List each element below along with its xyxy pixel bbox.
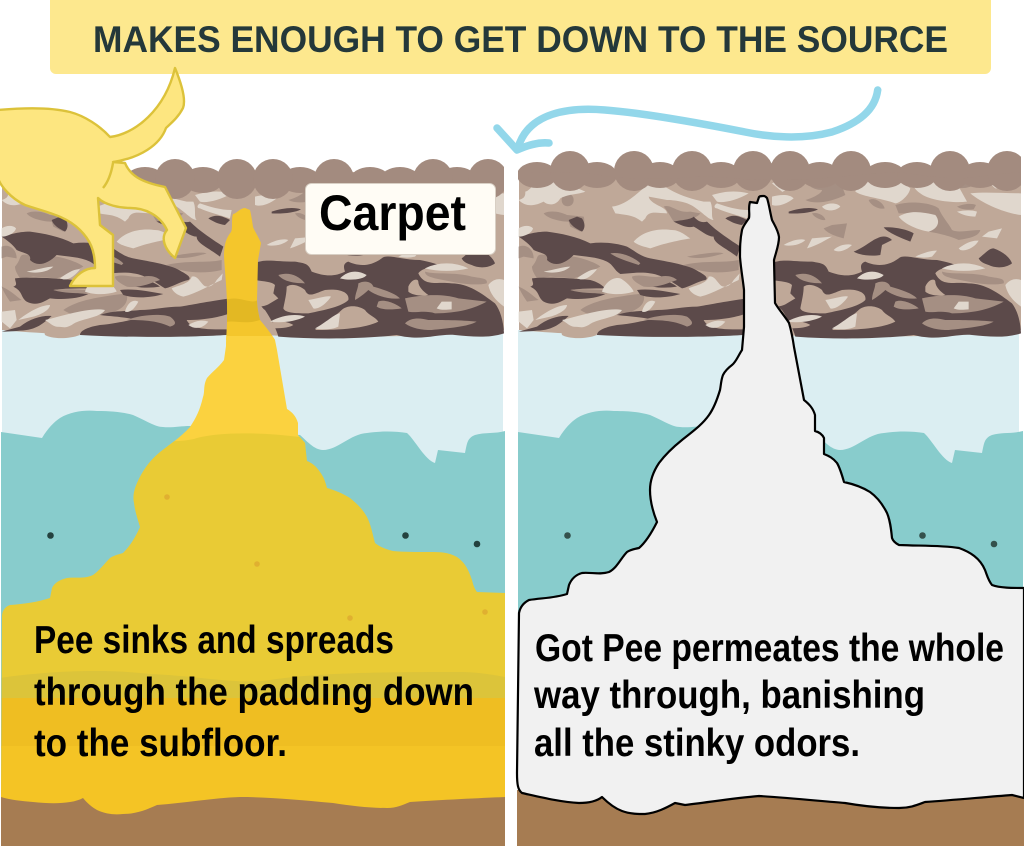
pee spreading through carpet and padding	[0, 200, 510, 816]
right caption: all the stinky odors.	[534, 722, 860, 765]
subfloor	[1, 790, 505, 846]
dog hindquarters icon	[0, 68, 186, 286]
padding layer: light upper	[2, 330, 503, 530]
left caption: to the subfloor.	[34, 722, 287, 765]
title banner: MAKES ENOUGH TO GET DOWN TO THE SOURCE	[93, 19, 948, 60]
padding layer: light upper	[518, 330, 1019, 530]
Got Pee treated area outline	[517, 196, 1024, 814]
carpet label	[306, 184, 496, 254]
right caption: way through, banishing	[533, 674, 925, 717]
padding dots	[47, 532, 480, 547]
title banner	[50, 0, 991, 74]
padding layer: teal lower	[1, 411, 505, 800]
right panel: cross-section with Got Pee	[517, 151, 1024, 846]
subfloor	[517, 790, 1024, 846]
left caption: Pee sinks and spreads	[34, 619, 394, 662]
padding dots	[564, 532, 997, 547]
left caption: through the padding down	[34, 671, 474, 714]
carpet	[2, 159, 508, 338]
padding layer: teal lower	[518, 411, 1023, 800]
left panel: cross-section with pee	[0, 159, 510, 846]
carpet	[517, 151, 1024, 338]
carpet label: Carpet	[319, 185, 466, 241]
curved arrow pointing to left panel	[497, 90, 878, 150]
